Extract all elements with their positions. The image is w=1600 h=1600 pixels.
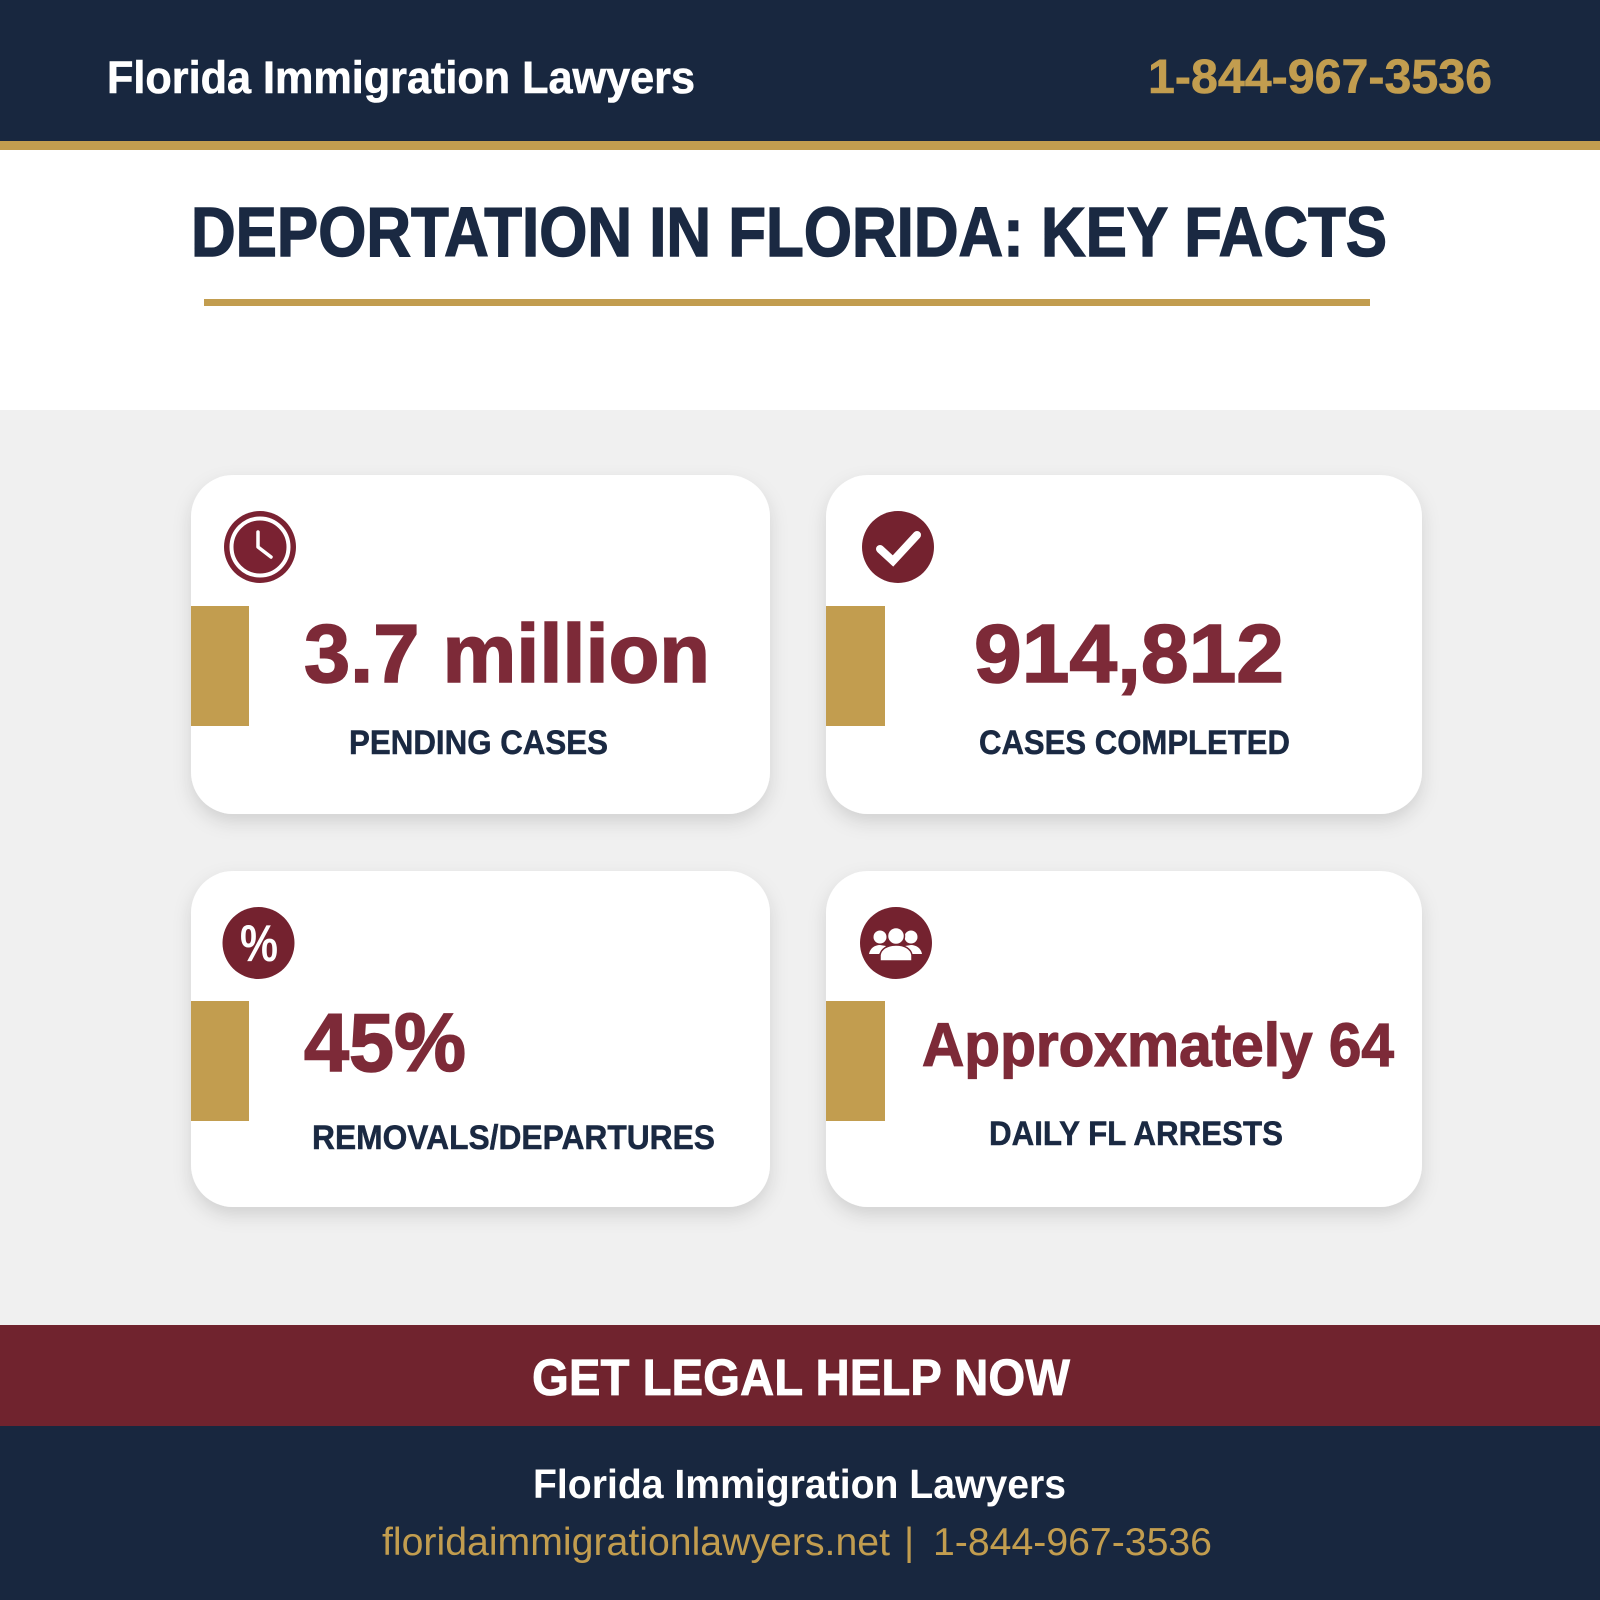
stat label: CASES COMPLETED	[979, 724, 1290, 762]
title: DEPORTATION IN FLORIDA: KEY FACTS	[191, 193, 1387, 271]
title underline	[204, 299, 1370, 306]
icon: check mark	[862, 511, 934, 583]
firm name: Florida Immigration Lawyers	[107, 52, 695, 103]
stat value: Approxmately 64	[922, 1011, 1394, 1079]
gold accent	[826, 1001, 885, 1121]
icon: percent	[222, 907, 294, 979]
panel: cases completed	[826, 475, 1422, 814]
footer separator: |	[904, 1521, 914, 1564]
footer website: floridaimmigrationlawyers.net	[382, 1521, 890, 1564]
panel: daily arrests	[826, 871, 1422, 1207]
gold accent	[191, 1001, 249, 1121]
phone number: 1-844-967-3536	[1148, 51, 1492, 104]
icon: clock	[224, 511, 296, 583]
footer phone: 1-844-967-3536	[933, 1521, 1212, 1564]
stat value: 914,812	[974, 607, 1284, 700]
content background	[0, 410, 1600, 1325]
header bar	[0, 0, 1600, 150]
panel: removals and departures	[191, 871, 770, 1207]
stat value: 3.7 million	[304, 607, 710, 700]
gold accent	[826, 606, 885, 726]
stat value: 45%	[304, 996, 466, 1089]
icon: people	[860, 907, 932, 979]
footer firm name: Florida Immigration Lawyers	[533, 1461, 1066, 1507]
gold accent	[191, 606, 249, 726]
stat label: PENDING CASES	[349, 724, 608, 762]
panel: pending cases	[191, 475, 770, 814]
stat label: REMOVALS/DEPARTURES	[312, 1119, 715, 1157]
icon: percent: %	[240, 915, 278, 973]
call to action band	[0, 1325, 1600, 1426]
footer	[0, 1426, 1600, 1600]
stat label: DAILY FL ARRESTS	[989, 1115, 1283, 1153]
call to action band: GET LEGAL HELP NOW	[532, 1349, 1071, 1406]
